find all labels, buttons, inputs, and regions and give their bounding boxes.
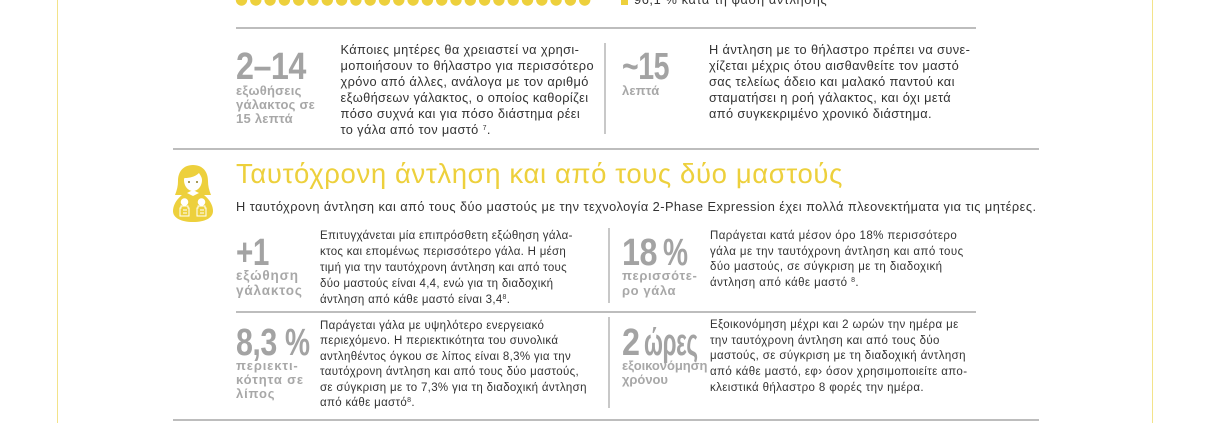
- stat: 18% more milk: %: [663, 232, 688, 274]
- stat: ~15 minutes: σας τελείως άδειο και μαλακό παντού και: [709, 74, 955, 89]
- stat: 2 hours saved: χρόνου: [622, 372, 668, 387]
- stat: ~15 minutes: χίζεται μέχρις ότου αισθανθείτε τον μαστό: [709, 58, 959, 73]
- page side border right: [1152, 0, 1153, 423]
- stat: +1 expression: τιμή για την ταυτόχρονη άντληση και από τους: [320, 262, 567, 274]
- stat: ~15 minutes: σταματήσει η ροή γάλακτος, και όχι μετά: [709, 90, 951, 105]
- stat: 8.3% fat content: αντληθέντος όγκου σε λίπος είναι 8,3% για την: [320, 351, 571, 363]
- stat: 2 hours saved: [622, 318, 967, 394]
- page side border left: [57, 0, 58, 423]
- stat: +1 expression: +1: [236, 232, 269, 274]
- stat: 8.3% fat content: από κάθε μαστό8.: [320, 397, 415, 409]
- stat: 2 hours saved: από κάθε μαστό, εφ› όσον χρησιμοποιείτε απο-: [710, 366, 967, 378]
- stat: 8.3% fat content: 8,3: [236, 322, 277, 364]
- stat: 8.3% fat content: λίπος: [236, 386, 275, 401]
- stat: 2 hours saved: την ταυτόχρονη άντληση και από τους δύο: [710, 335, 940, 347]
- stat: +1 expression: [236, 230, 573, 306]
- stat: 18% more milk: ρο γάλα: [622, 283, 676, 298]
- stat: 18% more milk: άντληση από κάθε μαστό 8.: [710, 277, 859, 289]
- stat: +1 expression: Επιτυγχάνεται μία επιπρόσθετη εξώθηση γάλα-: [320, 230, 573, 242]
- stat: ~15 minutes: λεπτά: [622, 83, 659, 98]
- stat: 2–14 expressions: το γάλα από τον μαστό 7.: [340, 122, 491, 137]
- icon: mother with breast shields: [173, 165, 213, 222]
- stat: 8.3% fat content: ταυτόχρονη άντληση και από τους δύο μαστούς,: [320, 366, 579, 378]
- stat: 8.3% fat content: σε σύγκριση με το 7,3% για τη διαδοχική άντληση: [320, 382, 587, 394]
- dotted yellow bar chart row: [236, 0, 590, 6]
- stat: 2–14 expressions: χρόνο από άλλες, ανάλογα με τον αριθμό: [340, 74, 589, 89]
- stat: ~15 minutes: ~15: [622, 46, 669, 88]
- stat: +1 expression: δύο μαστούς είναι 4,4, ενώ για τη διαδοχική: [320, 278, 553, 290]
- stat: 2 hours saved: μαστούς, σε σύγκριση με τη διαδοχική άντληση: [710, 350, 966, 362]
- stat: +1 expression: άντληση από κάθε μαστό είναι 3,48.: [320, 294, 510, 306]
- stat: 2–14 expressions: γάλακτος σε: [236, 97, 315, 112]
- stat: 18% more milk: [622, 230, 964, 298]
- section heading: Ταυτόχρονη άντληση και από τους δύο μαστούς: [236, 158, 843, 189]
- stat: 18% more milk: Παράγεται κατά μέσον όρο 18% περισσότερο: [710, 230, 957, 242]
- stat: 18% more milk: δύο μαστούς, σε σύγκριση με τη διαδοχική: [710, 261, 942, 273]
- stat: 2 hours saved: 2: [622, 322, 639, 364]
- stat: 2–14 expressions: Κάποιες μητέρες θα χρειαστεί να χρησι-: [340, 42, 579, 57]
- stat: +1 expression: γάλακτος: [236, 283, 303, 298]
- stat: +1 expression: κτος και επομένως περισσότερο γάλα. Η μέση: [320, 246, 566, 258]
- stat: 2–14 expressions: [236, 42, 594, 137]
- stat: ~15 minutes: από συγκεκριμένο χρονικό διάστημα.: [709, 106, 932, 121]
- stat: 8.3% fat content: Παράγεται γάλα με υψηλότερο ενεργειακό: [320, 320, 544, 332]
- stat: 18% more milk: γάλα με την ταυτόχρονη άντληση και από τους: [710, 246, 964, 258]
- stat: 2 hours saved: ώρες: [644, 322, 698, 364]
- stat: 8.3% fat content: [236, 320, 587, 409]
- stat: 8.3% fat content: κότητα σε: [236, 372, 304, 387]
- stat: 2–14 expressions: μοποιήσουν το θήλαστρο για περισσότερο: [340, 58, 594, 73]
- stat: ~15 minutes: [622, 42, 970, 121]
- stat: 2–14 expressions: εξωθήσεων γάλακτος, ο οποίος καθορίζει: [340, 90, 588, 105]
- stat: 18% more milk: περισσότε-: [622, 268, 697, 283]
- stat: 2–14 expressions: 2–14: [236, 46, 306, 88]
- stat: +1 expression: εξώθηση: [236, 268, 299, 283]
- stat: 8.3% fat content: %: [285, 322, 310, 364]
- stat: 2–14 expressions: πόσο συχνά και για πόσο διάστημα ρέει: [340, 106, 580, 121]
- stat: 18% more milk: 18: [622, 232, 657, 274]
- stat: 8.3% fat content: περιεχόμενο. Η περιεκτικότητα του συνολικά: [320, 335, 558, 347]
- stat: 2 hours saved: εξοικονόμηση: [622, 358, 707, 373]
- section intro: Η ταυτόχρονη άντληση και από τους δύο μαστούς με την τεχνολογία 2-Phase Expression έχει πολλά πλεονεκτήματα για τις μητέρες.: [236, 198, 1036, 214]
- stat: 2–14 expressions: εξωθήσεις: [236, 83, 302, 98]
- stat: ~15 minutes: Η άντληση με το θήλαστρο πρέπει να συνε-: [709, 42, 970, 57]
- stat: 2–14 expressions: 15 λεπτά: [236, 111, 293, 126]
- stat: 2 hours saved: κλειστικά θήλαστρο 8 φορές την ημέρα.: [710, 382, 924, 394]
- stat: 8.3% fat content: περιεκτι-: [236, 358, 299, 373]
- stat: 2 hours saved: Εξοικονόμηση μέχρι και 2 ωρών την ημέρα με: [710, 319, 959, 331]
